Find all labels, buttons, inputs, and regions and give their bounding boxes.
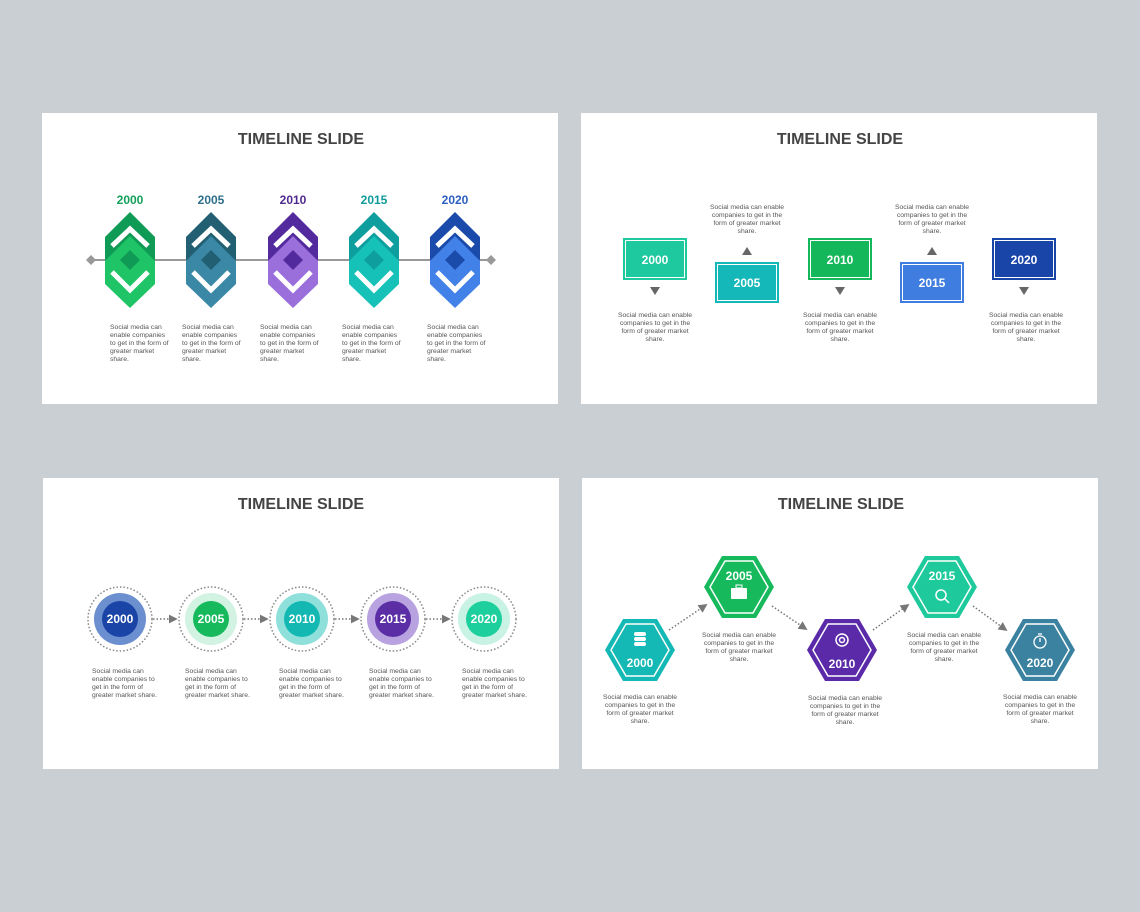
milestone 2015: enable companies: [342, 332, 398, 339]
circle 2015: Social media can: [369, 668, 421, 675]
circle 2000: [88, 587, 157, 699]
circle 2010: greater market share.: [279, 692, 344, 699]
box 2005: share.: [738, 228, 757, 235]
box 2020: Social media can enable: [989, 312, 1063, 319]
circle 2000: greater market share.: [92, 692, 157, 699]
circle 2005: [179, 587, 250, 699]
milestone 2005: enable companies: [182, 332, 238, 339]
box 2010: share.: [831, 336, 850, 343]
circle 2010: Social media can: [279, 668, 331, 675]
panel: timeline chevrons: [42, 113, 558, 404]
icon: stopwatch: [1034, 634, 1046, 648]
circle 2005: get in the form of: [185, 684, 236, 691]
circle 2015: greater market share.: [369, 692, 434, 699]
box 2005: form of greater market: [713, 220, 781, 227]
box 2020: [989, 238, 1063, 343]
milestone 2010: [260, 193, 319, 363]
milestone 2000: [105, 193, 169, 363]
milestone 2015: [342, 193, 401, 363]
milestone 2010: share.: [260, 356, 279, 363]
milestone 2015: to get in the form of: [342, 340, 401, 347]
panel: timeline hexagons: [582, 478, 1098, 769]
milestone 2005: [182, 193, 241, 363]
title: TIMELINE SLIDE: [778, 496, 904, 513]
milestone 2005: greater market: [182, 348, 226, 355]
icon: briefcase: [731, 585, 747, 599]
circle 2020: Social media can: [462, 668, 514, 675]
hexagon 2000: 2000: [627, 656, 654, 670]
milestone 2015: share.: [342, 356, 361, 363]
hexagon 2000: Social media can enable: [603, 694, 677, 701]
title: TIMELINE SLIDE: [238, 496, 364, 513]
hexagon 2010: companies to get in the: [810, 703, 880, 710]
circle 2015: 2015: [380, 612, 407, 626]
milestone 2000: 2000: [117, 193, 144, 207]
milestone 2005: to get in the form of: [182, 340, 241, 347]
milestone 2000: Social media can: [110, 324, 162, 331]
circle 2005: greater market share.: [185, 692, 250, 699]
hexagon 2015: form of greater market: [910, 648, 978, 655]
circle 2015: [361, 587, 434, 699]
circle 2020: enable companies to: [462, 676, 525, 683]
circle 2000: enable companies to: [92, 676, 155, 683]
box 2015: [895, 204, 969, 303]
box 2015: companies to get in the: [897, 212, 967, 219]
hexagon 2020: Social media can enable: [1003, 694, 1077, 701]
milestone 2020: enable companies: [427, 332, 483, 339]
circle 2010: enable companies to: [279, 676, 342, 683]
title: TIMELINE SLIDE: [238, 131, 364, 148]
box 2000: share.: [646, 336, 665, 343]
circle 2005: 2005: [198, 612, 225, 626]
hexagon 2010: [807, 619, 882, 726]
hexagon 2015: companies to get in the: [909, 640, 979, 647]
milestone 2005: Social media can: [182, 324, 234, 331]
circle 2015: get in the form of: [369, 684, 420, 691]
milestone 2020: [427, 193, 486, 363]
circle 2020: [452, 587, 527, 699]
hexagon 2020: [1003, 619, 1077, 725]
circle 2000: 2000: [107, 612, 134, 626]
icon: magnifier: [936, 590, 949, 603]
milestone 2020: 2020: [442, 193, 469, 207]
panel: timeline boxes: [581, 113, 1097, 404]
box 2000: form of greater market: [621, 328, 689, 335]
title: TIMELINE SLIDE: [777, 131, 903, 148]
icon: database: [634, 632, 646, 646]
milestone 2020: to get in the form of: [427, 340, 486, 347]
box 2000: Social media can enable: [618, 312, 692, 319]
circle 2020: 2020: [471, 612, 498, 626]
milestone 2010: enable companies: [260, 332, 316, 339]
timeline axis: [86, 255, 496, 265]
hexagon 2000: share.: [631, 718, 650, 725]
milestone 2015: greater market: [342, 348, 386, 355]
box 2005: companies to get in the: [712, 212, 782, 219]
box 2010: companies to get in the: [805, 320, 875, 327]
hexagon 2020: share.: [1031, 718, 1050, 725]
box 2010: Social media can enable: [803, 312, 877, 319]
box 2015: 2015: [919, 276, 946, 290]
milestone 2015: 2015: [361, 193, 388, 207]
milestone 2000: greater market: [110, 348, 154, 355]
hexagon 2010: form of greater market: [811, 711, 879, 718]
hexagon 2020: companies to get in the: [1005, 702, 1075, 709]
circle 2000: get in the form of: [92, 684, 143, 691]
hexagon 2010: share.: [836, 719, 855, 726]
hexagon 2005: form of greater market: [705, 648, 773, 655]
milestone 2005: 2005: [198, 193, 225, 207]
hexagon 2010: 2010: [829, 657, 856, 671]
connector arrows: [153, 618, 449, 620]
milestone 2010: 2010: [280, 193, 307, 207]
hexagon 2015: Social media can enable: [907, 632, 981, 639]
box 2005: Social media can enable: [710, 204, 784, 211]
icon: target: [836, 634, 848, 646]
box 2010: 2010: [827, 253, 854, 267]
milestone 2005: share.: [182, 356, 201, 363]
box 2020: companies to get in the: [991, 320, 1061, 327]
hexagon 2005: 2005: [726, 569, 753, 583]
hexagon 2020: form of greater market: [1006, 710, 1074, 717]
box 2005: [710, 204, 784, 303]
milestone 2010: greater market: [260, 348, 304, 355]
box 2020: 2020: [1011, 253, 1038, 267]
box 2020: form of greater market: [992, 328, 1060, 335]
circle 2015: enable companies to: [369, 676, 432, 683]
box 2015: Social media can enable: [895, 204, 969, 211]
milestone 2000: enable companies: [110, 332, 166, 339]
circle 2020: greater market share.: [462, 692, 527, 699]
hexagon 2015: 2015: [929, 569, 956, 583]
box 2005: 2005: [734, 276, 761, 290]
circle 2005: enable companies to: [185, 676, 248, 683]
circle 2010: 2010: [289, 612, 316, 626]
milestone 2020: Social media can: [427, 324, 479, 331]
milestone 2015: Social media can: [342, 324, 394, 331]
circle 2000: Social media can: [92, 668, 144, 675]
hexagon 2005: share.: [730, 656, 749, 663]
hexagon 2015: [907, 556, 981, 663]
circle 2010: [270, 587, 344, 699]
hexagon 2000: [603, 619, 677, 725]
circle 2020: get in the form of: [462, 684, 513, 691]
hexagon 2000: companies to get in the: [605, 702, 675, 709]
hexagon 2000: form of greater market: [606, 710, 674, 717]
box 2015: form of greater market: [898, 220, 966, 227]
connector arrows: [669, 605, 1006, 630]
milestone 2020: greater market: [427, 348, 471, 355]
milestone 2020: share.: [427, 356, 446, 363]
hexagon 2005: [702, 556, 776, 663]
box 2015: share.: [923, 228, 942, 235]
box 2000: [618, 238, 692, 343]
circle 2005: Social media can: [185, 668, 237, 675]
milestone 2000: share.: [110, 356, 129, 363]
hexagon 2015: share.: [935, 656, 954, 663]
box 2010: form of greater market: [806, 328, 874, 335]
box 2000: 2000: [642, 253, 669, 267]
box 2010: [803, 238, 877, 343]
circle 2010: get in the form of: [279, 684, 330, 691]
hexagon 2005: Social media can enable: [702, 632, 776, 639]
milestone 2010: Social media can: [260, 324, 312, 331]
milestone 2010: to get in the form of: [260, 340, 319, 347]
box 2000: companies to get in the: [620, 320, 690, 327]
hexagon 2020: 2020: [1027, 656, 1054, 670]
hexagon 2010: Social media can enable: [808, 695, 882, 702]
milestone 2000: to get in the form of: [110, 340, 169, 347]
box 2020: share.: [1017, 336, 1036, 343]
hexagon 2005: companies to get in the: [704, 640, 774, 647]
panel: timeline circles: [43, 478, 559, 769]
